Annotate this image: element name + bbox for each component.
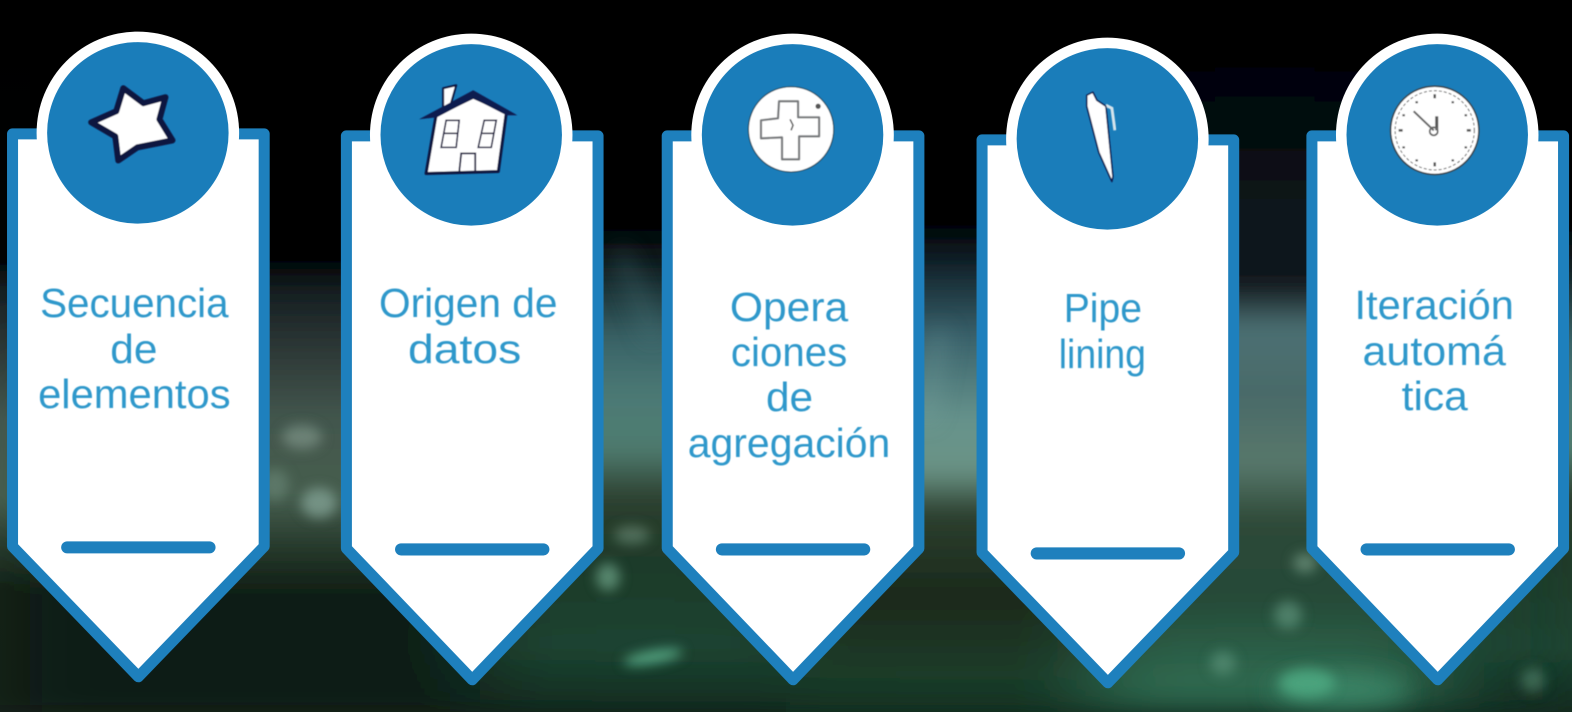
- heading: Operaciones de agregación: [688, 284, 890, 466]
- panel: Pipelining: [982, 38, 1234, 683]
- panel: Iteración automática: [1312, 34, 1564, 680]
- heading: Iteración automática: [1355, 282, 1514, 419]
- bar: [1361, 543, 1515, 555]
- panel: Origen de datos: [346, 34, 598, 680]
- heading: Operaciones de agregación: agregación: [688, 420, 890, 466]
- heading: Pipelining: lining: [1059, 331, 1146, 377]
- bar: [1031, 547, 1185, 559]
- heading: Iteración automática: tica: [1402, 373, 1468, 419]
- icon: clock: [1391, 86, 1479, 174]
- bar: [395, 543, 549, 555]
- heading: Origen de datos: [379, 280, 557, 372]
- panel: Operaciones de agregación: [667, 34, 919, 680]
- heading: Pipelining: [1059, 285, 1146, 377]
- icon: house: [419, 85, 517, 173]
- heading: Origen de datos: datos: [408, 326, 521, 372]
- heading: Secuencia de elementos: [38, 280, 231, 417]
- icon: pen: [1087, 92, 1115, 181]
- heading: Pipelining: Pipe: [1064, 285, 1142, 331]
- heading: Operaciones de agregación: Opera: [730, 284, 848, 330]
- heading: Operaciones de agregación: de: [766, 374, 813, 420]
- heading: Iteración automática: Iteración: [1355, 282, 1514, 328]
- heading: Secuencia de elementos: de: [110, 326, 157, 372]
- icon: medical cross: [748, 87, 834, 172]
- icon: star: [91, 88, 172, 160]
- heading: Iteración automática: automá: [1363, 328, 1506, 374]
- heading: Operaciones de agregación: ciones: [731, 329, 847, 375]
- bar: [716, 543, 870, 555]
- panel: Secuencia de elementos: [13, 32, 264, 677]
- bar: [61, 541, 216, 553]
- heading: Secuencia de elementos: Secuencia: [40, 280, 229, 326]
- heading: Origen de datos: Origen de: [379, 280, 557, 326]
- heading: Secuencia de elementos: elementos: [38, 371, 231, 417]
